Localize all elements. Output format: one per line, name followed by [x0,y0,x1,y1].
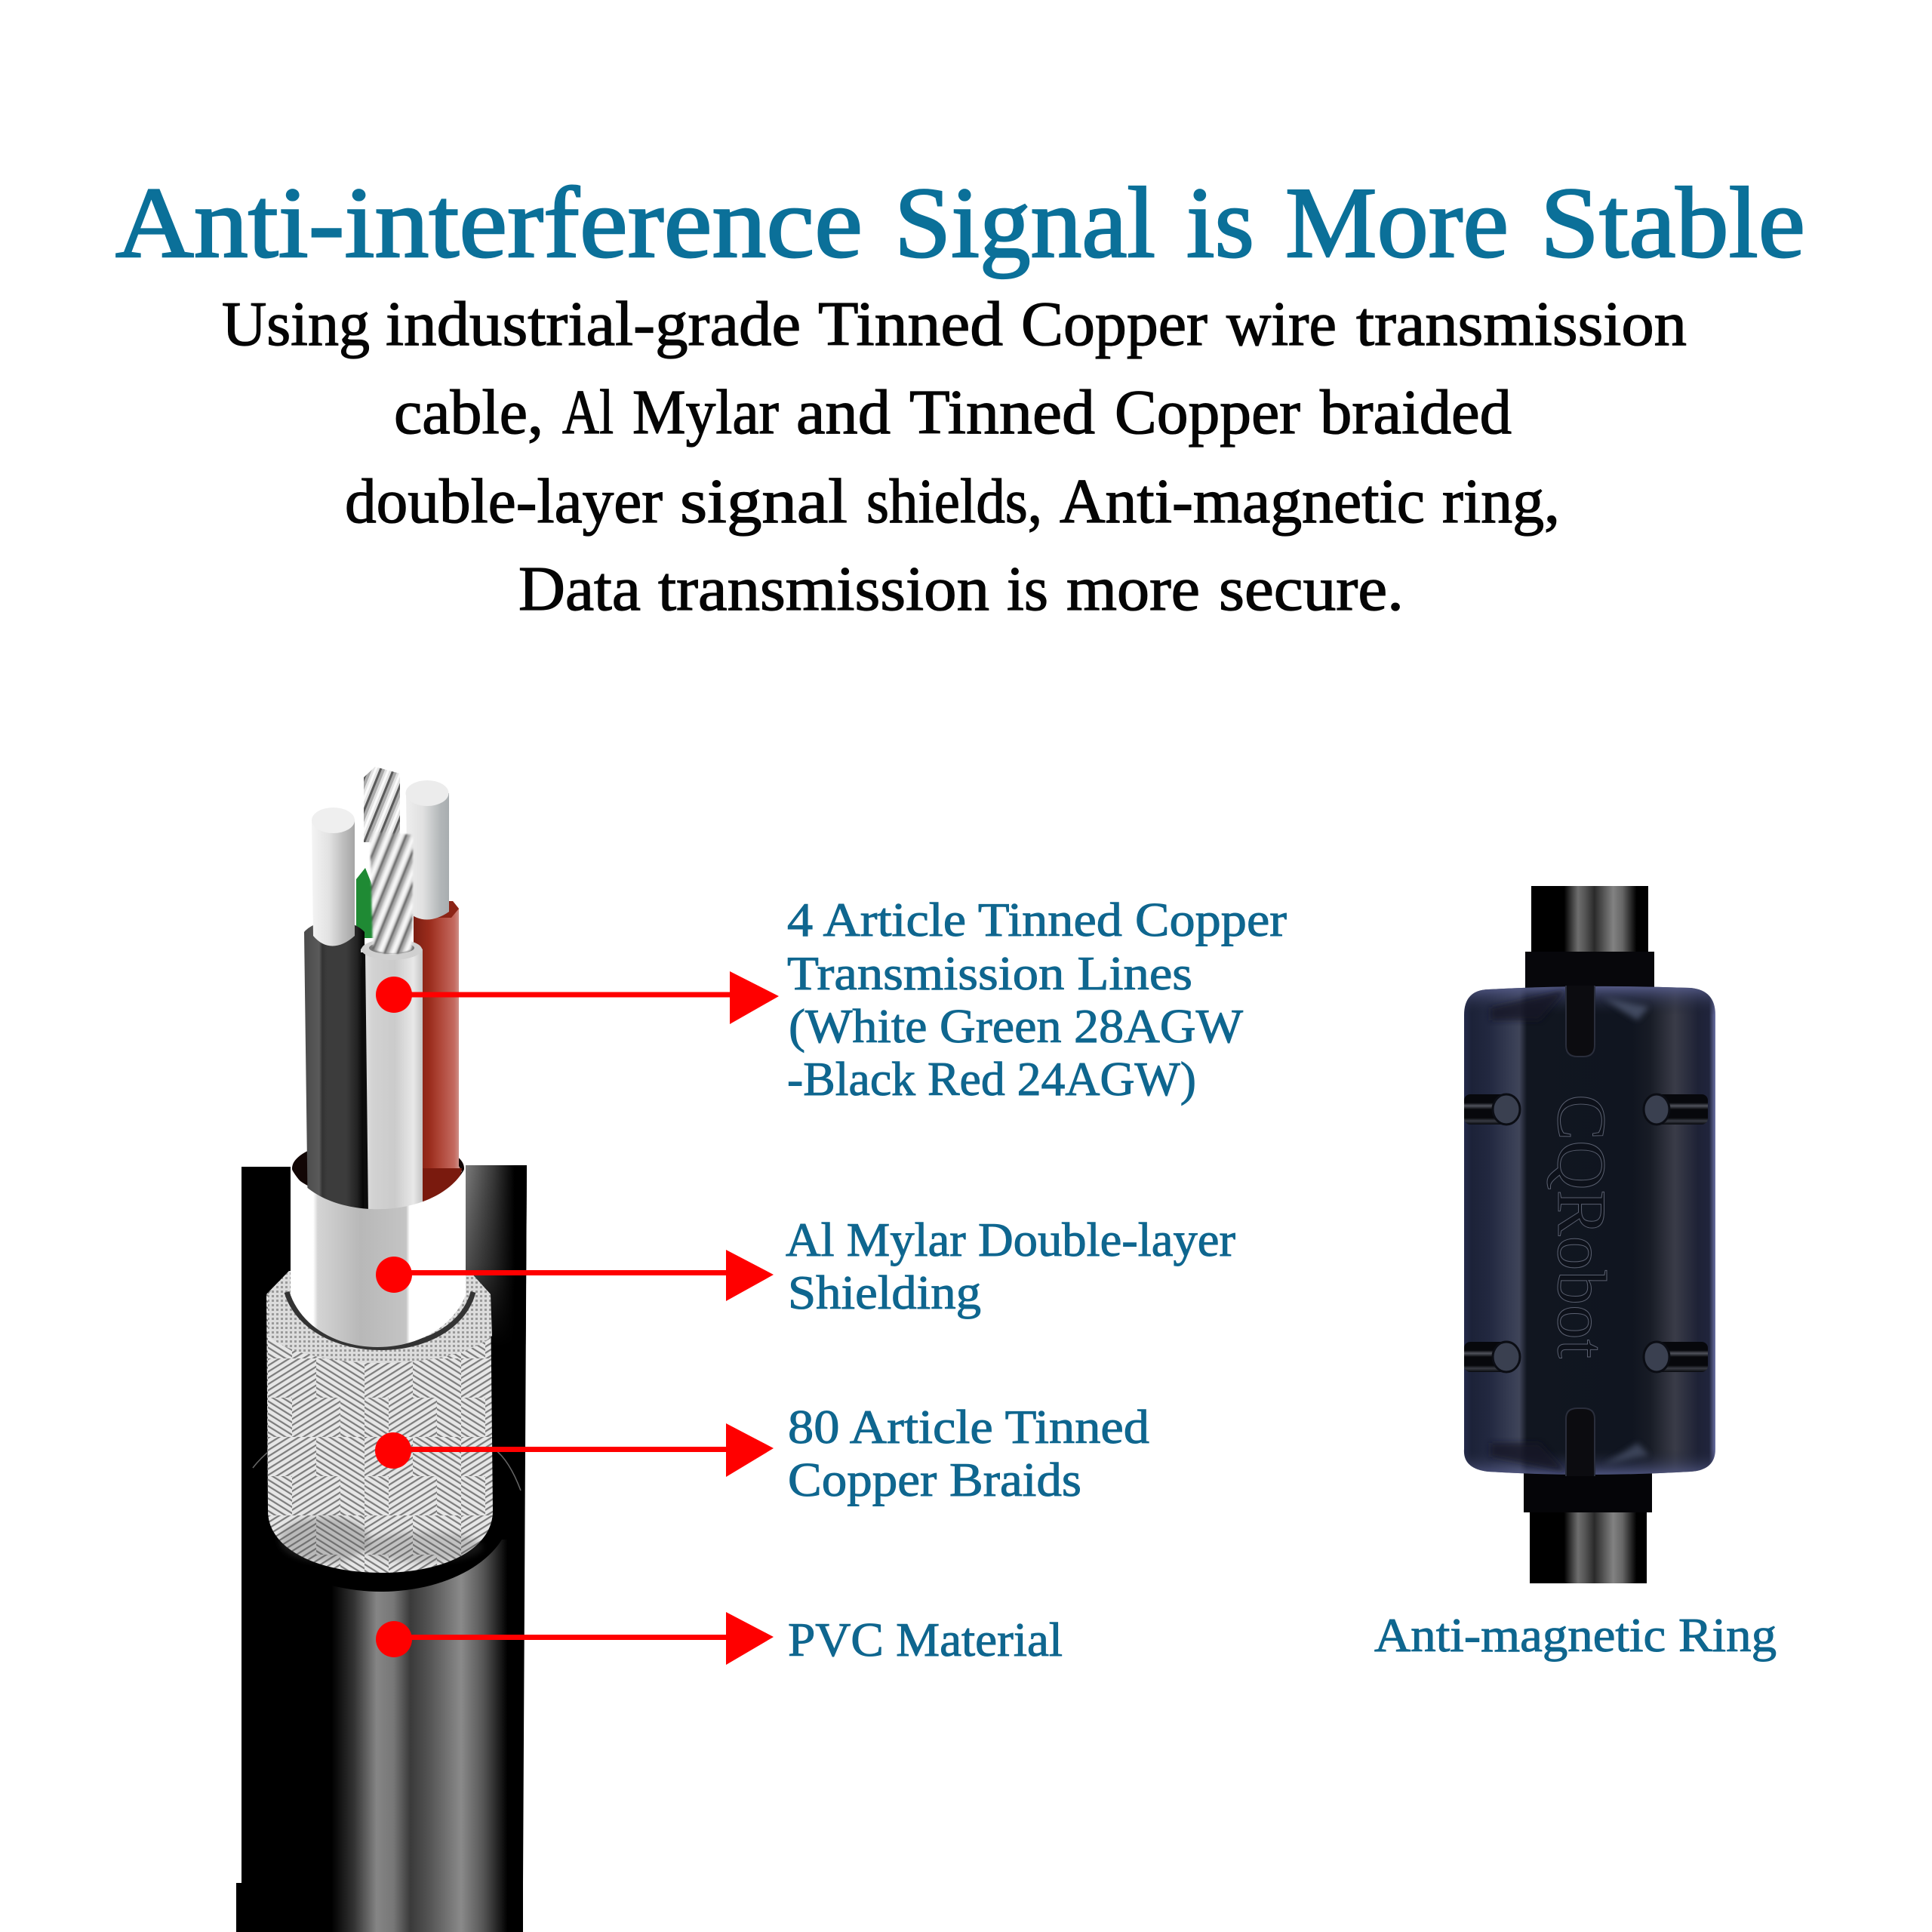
callout: copper braids: 80 Article Tinned [788,1400,1149,1454]
side clip, lower right [1644,1342,1708,1372]
tinned copper braid [266,1271,493,1573]
title: Signal [894,167,1155,278]
black insulated wire [304,921,365,1223]
collar, bottom [1524,1472,1652,1512]
intro paragraph: and [796,377,891,448]
intro paragraph: transmission [658,554,989,624]
callout: Al mylar shielding [376,1213,1235,1319]
anti-magnetic ring illustration [1464,886,1715,1583]
callout: copper braids [375,1400,1149,1506]
title [115,167,1805,278]
ring caption: Anti-magnetic Ring [1374,1608,1777,1662]
intro paragraph: signal [680,466,848,537]
intro paragraph: secure. [1219,554,1404,624]
callout: transmission lines: Transmission Lines [787,946,1192,1000]
intro paragraph: Tinned [909,377,1095,448]
intro paragraph: ring, [1442,466,1560,537]
intro paragraph: Tinned [818,289,1003,359]
callout: transmission lines [376,893,1287,1106]
side clip, upper right [1644,1094,1708,1124]
title: More [1285,167,1509,278]
intro paragraph: Al [562,377,614,448]
side clip, upper left [1464,1094,1520,1124]
callout: PVC material: PVC Material [788,1613,1063,1666]
cable cross-section illustration [236,767,527,1932]
intro paragraph: Using [222,289,370,359]
notch, bottom [1566,1408,1595,1476]
side clip, lower left [1464,1342,1520,1372]
intro paragraph: double-layer [345,466,663,537]
callout: transmission lines: (White Green 28AGW [789,999,1244,1053]
silver conductor, black wire [312,808,355,946]
twisted conductor, back [364,767,400,842]
outer PVC jacket [236,1165,527,1932]
callout: PVC material [376,1612,1063,1666]
intro paragraph: Mylar [632,377,779,448]
title: Anti-interference [115,167,863,278]
white insulated wire [361,939,423,1223]
intro paragraph: cable, [394,377,543,448]
ring body [1464,986,1715,1475]
intro paragraph: wire [1226,289,1337,359]
green insulated wire [356,868,374,938]
title: is [1186,167,1254,278]
intro paragraph: industrial-grade [386,289,801,359]
notch, top [1566,986,1595,1057]
callout: transmission lines: -Black Red 24AGW) [787,1052,1196,1106]
dark cavity inside the foil [292,1138,464,1198]
intro paragraph: braided [1320,377,1512,448]
callout: Al mylar shielding: Shielding [788,1266,981,1319]
Al mylar foil shield [291,1167,466,1347]
callout: Al mylar shielding: Al Mylar Double-layer [786,1213,1235,1266]
embossed brand text: CQRobot [1543,1094,1620,1358]
intro paragraph: Copper [1115,377,1300,448]
intro paragraph: more [1066,554,1200,624]
cable stub, bottom [1530,1508,1647,1583]
intro paragraph: is [1007,554,1048,624]
intro paragraph: Data [518,554,641,624]
red insulated wire [414,901,462,1223]
callout: transmission lines: 4 Article Tinned Copper [787,893,1287,946]
twisted conductor, front [370,832,413,954]
intro paragraph: transmission [1356,289,1687,359]
intro paragraph: Copper [1021,289,1208,359]
title: Stable [1540,167,1805,278]
intro paragraph [222,289,1687,624]
callout: copper braids: Copper Braids [788,1453,1081,1506]
intro paragraph: Anti-magnetic [1060,466,1425,537]
collar, top [1525,952,1654,989]
cable stub, top [1531,886,1648,954]
silver conductor, red wire [406,780,449,919]
intro paragraph: shields, [866,466,1042,537]
